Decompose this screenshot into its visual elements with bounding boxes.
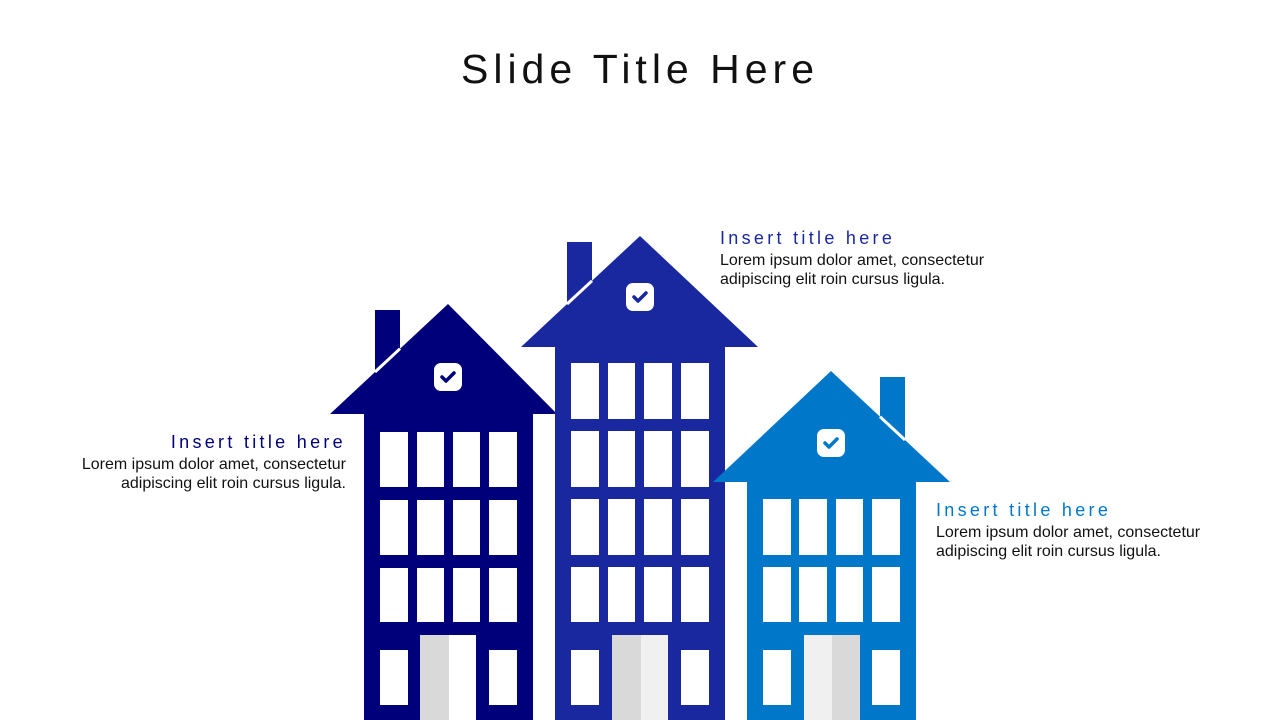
- body: middle: adipiscing elit roin cursus ligula.: [720, 271, 945, 288]
- building: right: [713, 371, 950, 720]
- body: left: [82, 456, 346, 492]
- text block: middle: [720, 228, 984, 288]
- body: right: Lorem ipsum dolor amet, consectetur: [936, 524, 1200, 541]
- body: middle: [720, 252, 984, 288]
- icon: check: [434, 363, 462, 391]
- body: middle: Lorem ipsum dolor amet, consectetur: [720, 252, 984, 269]
- body: left: Lorem ipsum dolor amet, consectetur: [82, 456, 346, 473]
- icon: check: [817, 429, 845, 457]
- text block: right: [936, 500, 1200, 560]
- building: middle: [521, 236, 758, 720]
- heading: middle: Insert title here: [720, 228, 895, 248]
- body: right: [936, 524, 1200, 560]
- heading: left: Insert title here: [171, 432, 346, 452]
- body: left: adipiscing elit roin cursus ligula.: [121, 475, 346, 492]
- body: right: adipiscing elit roin cursus ligula.: [936, 543, 1161, 560]
- heading: right: Insert title here: [936, 500, 1111, 520]
- title: Slide Title Here: [461, 46, 819, 92]
- icon: check: [626, 283, 654, 311]
- text block: left: [82, 432, 346, 492]
- building: left: [330, 304, 557, 720]
